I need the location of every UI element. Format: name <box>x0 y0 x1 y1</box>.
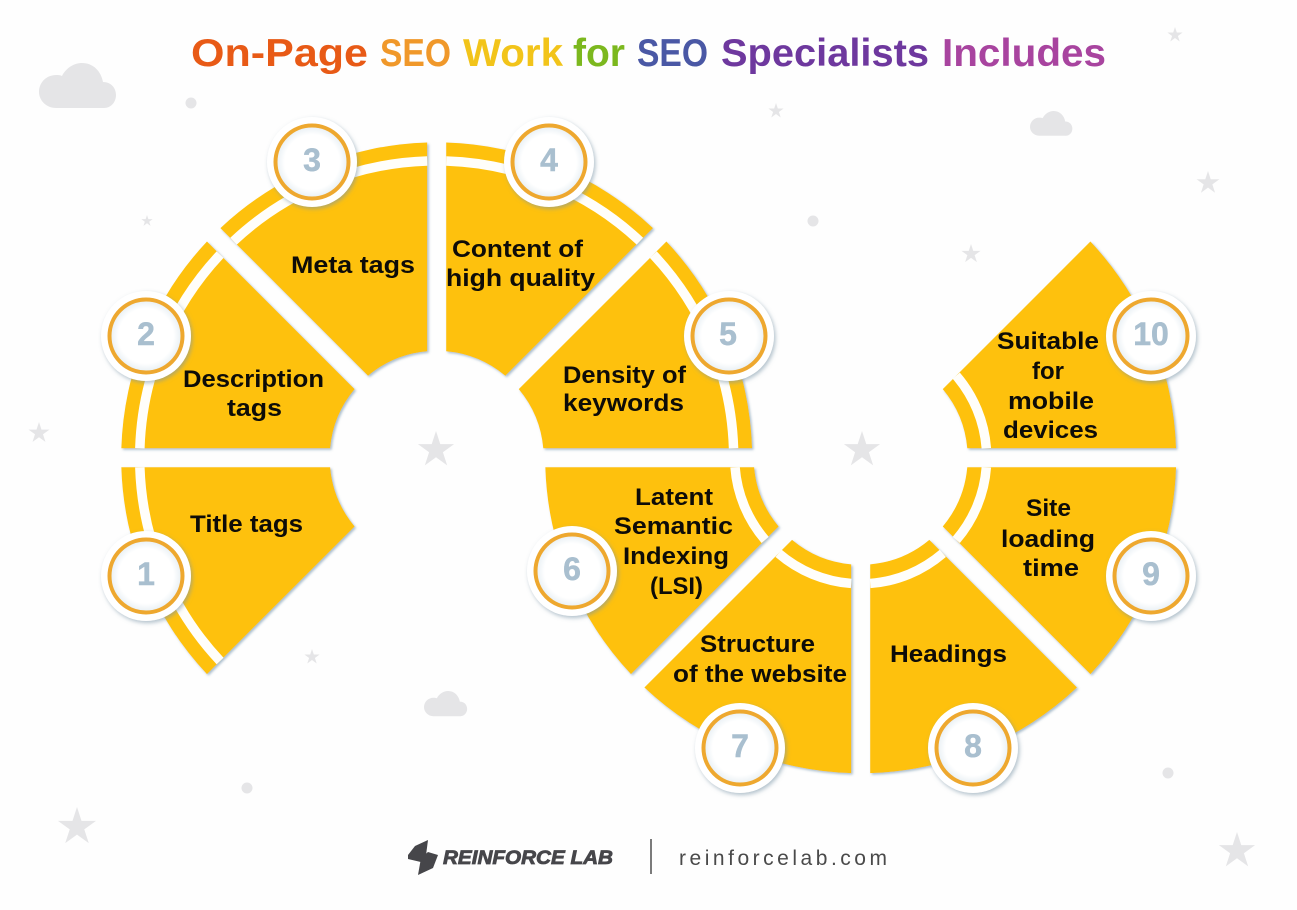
title: Specialists <box>721 32 929 75</box>
label 2: tags <box>227 395 282 422</box>
label 6: Semantic <box>614 513 733 540</box>
label 10: for <box>1032 358 1064 385</box>
cloud: bottom centre <box>424 691 467 716</box>
badge 5: 5 <box>719 316 737 352</box>
segment 6: Latent Semantic Indexing (LSI) <box>527 467 779 674</box>
label 4: high quality <box>446 265 595 292</box>
badge 1: 1 <box>137 556 155 592</box>
badge 7 <box>695 703 785 793</box>
wedge 8 <box>870 540 1077 773</box>
wedge 5 <box>519 242 752 448</box>
badge 2: 2 <box>137 316 155 352</box>
label 10: Suitable <box>997 328 1099 355</box>
badge 2 <box>101 291 191 381</box>
segment 1: Title tags <box>101 467 355 674</box>
badge 8 <box>928 703 1018 793</box>
wedge 9 <box>943 467 1176 674</box>
badge 6: 6 <box>563 551 581 587</box>
title: SEO <box>380 32 451 75</box>
wedge 1 <box>121 467 355 674</box>
title: Work <box>463 32 563 75</box>
segment 10: Suitable for mobile devices <box>943 242 1196 448</box>
label 10: devices <box>1003 417 1098 444</box>
label 5 <box>563 362 687 417</box>
segment 9: Site loading time <box>943 467 1196 674</box>
badge 10: 10 <box>1133 316 1169 352</box>
badge 9: 9 <box>1142 556 1160 592</box>
segment 7: Structure of the website <box>644 540 851 793</box>
label 7 <box>673 631 847 688</box>
label 10: mobile <box>1008 388 1094 415</box>
badge 8: 8 <box>964 728 982 764</box>
website: reinforcelab.com <box>679 847 887 870</box>
badge 1 <box>101 531 191 621</box>
footer logo and website <box>408 839 887 875</box>
logo wordmark: REINFORCE LAB <box>443 848 613 869</box>
segment 5: Density of keywords <box>519 242 774 448</box>
badge 4: 4 <box>540 142 558 178</box>
wedge 6 <box>545 467 779 674</box>
wedge 10 <box>943 242 1176 448</box>
title: for <box>573 32 625 75</box>
segment 8: Headings <box>870 540 1077 793</box>
label 9: loading <box>1001 526 1095 553</box>
badge 7: 7 <box>731 728 749 764</box>
segment 4: Content of high quality <box>446 117 653 376</box>
label 2: Description <box>183 366 324 393</box>
badge 9 <box>1106 531 1196 621</box>
label 5: Density of <box>563 362 687 389</box>
icon: Reinforce Lab logo <box>408 840 438 875</box>
badge 3 <box>267 117 357 207</box>
label 9 <box>1001 495 1095 582</box>
title: On-Page <box>191 32 368 75</box>
segment 2: Description tags <box>101 242 355 448</box>
cloud: top right <box>1030 111 1072 136</box>
wedge 4 <box>446 142 653 376</box>
label 7: of the website <box>673 661 847 688</box>
label 6: Indexing <box>623 543 729 570</box>
label 9: time <box>1023 555 1079 582</box>
label 4 <box>446 236 595 292</box>
title <box>191 32 1106 75</box>
wedge 7 <box>644 540 851 773</box>
label 9: Site <box>1026 495 1071 522</box>
badge 5 <box>684 291 774 381</box>
title: SEO <box>637 32 708 75</box>
label 2 <box>183 366 324 422</box>
label 5: keywords <box>563 390 684 417</box>
label 10 <box>997 328 1099 444</box>
label 6 <box>614 484 733 600</box>
badge 6 <box>527 526 617 616</box>
label 1: Title tags <box>190 511 303 538</box>
label 6: (LSI) <box>650 573 703 600</box>
badge 10 <box>1106 291 1196 381</box>
label 6: Latent <box>635 484 713 511</box>
label 8: Headings <box>890 641 1007 668</box>
cloud: top left <box>39 63 116 108</box>
segment 3: Meta tags <box>220 117 427 376</box>
label 3: Meta tags <box>291 252 415 279</box>
badge 3: 3 <box>303 142 321 178</box>
wedge 2 <box>121 242 355 448</box>
title: Includes <box>942 32 1106 75</box>
wedge 3 <box>220 142 427 376</box>
badge 4 <box>504 117 594 207</box>
label 7: Structure <box>700 631 815 658</box>
label 4: Content of <box>452 236 584 263</box>
